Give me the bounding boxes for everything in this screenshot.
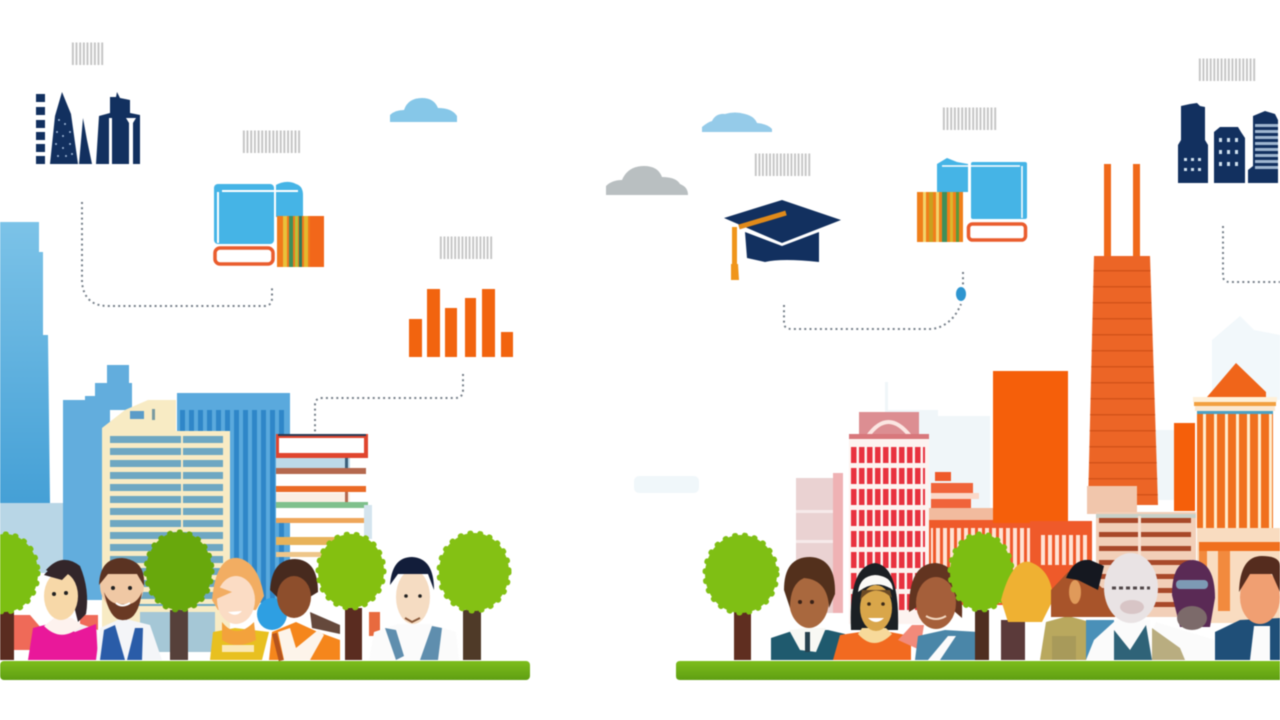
connector: dotted line 3	[784, 272, 963, 329]
banded low building	[1096, 512, 1196, 617]
infographic canvas: IIIIIIIIIIIIIIII	[242, 124, 301, 160]
person: man with dark hair	[369, 557, 459, 660]
person: woman with white headband	[833, 563, 911, 660]
tree: left 4	[439, 533, 509, 660]
person: man in purple cap	[1152, 560, 1234, 660]
stepped orange block	[931, 472, 979, 509]
connector: dotted line 1	[82, 202, 272, 306]
stack of books	[276, 434, 372, 557]
pale far tower	[1212, 316, 1280, 400]
tall blue tower	[0, 222, 50, 503]
infographic canvas: IIIIIIIIIIIIIIII	[754, 147, 811, 183]
icon: light blue cloud left	[390, 98, 457, 122]
low pale building	[0, 503, 64, 573]
icon: grey cloud	[606, 166, 688, 195]
tan box	[1087, 486, 1137, 514]
connector: dotted line 2	[315, 374, 463, 432]
person: white haired man	[1086, 553, 1158, 660]
icon: graduation cap	[724, 200, 841, 280]
tree: left 3	[318, 534, 384, 660]
mid blue building	[63, 365, 132, 600]
pale background skyline	[885, 382, 1188, 520]
infographic canvas: IIIIIIIII	[71, 36, 104, 72]
person: woman with orange vest	[257, 559, 340, 661]
person: bearded man in blue vest	[96, 558, 162, 660]
tree: left 1	[0, 534, 38, 660]
person: woman in pink	[28, 560, 98, 660]
columned building	[1193, 363, 1280, 623]
icon: navy city skyline left	[36, 92, 140, 164]
icon: open book and stripes left	[214, 182, 324, 267]
rear blue building	[177, 393, 290, 605]
red-orange low block	[1030, 521, 1092, 596]
icon: light blue cloud right	[702, 112, 772, 132]
cream striped building	[102, 400, 230, 650]
ground: right	[676, 661, 1280, 680]
tree: right 2	[950, 534, 1012, 660]
red backdrop shape	[14, 615, 98, 650]
tree: right 1	[705, 535, 777, 660]
icon: navy city skyline right	[1178, 103, 1278, 183]
ghost cloud centre	[634, 476, 699, 493]
person: backpack figure	[1040, 560, 1115, 660]
infographic canvas: IIIIIIIIIIIIIII	[942, 101, 997, 137]
right skyline	[796, 164, 1280, 624]
tall chimney tower	[1088, 164, 1158, 505]
person: man in teal vest	[771, 557, 845, 660]
infographic canvas: IIIIIIIIIIIIIII	[439, 230, 493, 266]
person: yellow haired figure	[1001, 562, 1053, 660]
bar chart icon	[409, 289, 513, 357]
pink pale building	[796, 473, 843, 613]
tree: left 2	[146, 532, 212, 660]
person: blonde woman with scarf	[210, 558, 269, 660]
big orange block	[993, 371, 1068, 523]
tan roof band and red block	[929, 508, 1036, 605]
person: man in navy jacket	[1215, 556, 1280, 660]
icon: book and stripes right	[917, 158, 1027, 242]
red strip behind tree	[369, 612, 380, 636]
red and white windowed building	[849, 412, 929, 624]
lower pale building strip	[140, 612, 215, 652]
ground: left	[0, 661, 530, 680]
left skyline	[0, 222, 372, 652]
person: woman in blue	[898, 563, 979, 660]
connector: dotted line 4	[1223, 226, 1280, 282]
icon: small blue marker	[956, 287, 966, 301]
small orange block	[1174, 423, 1195, 511]
